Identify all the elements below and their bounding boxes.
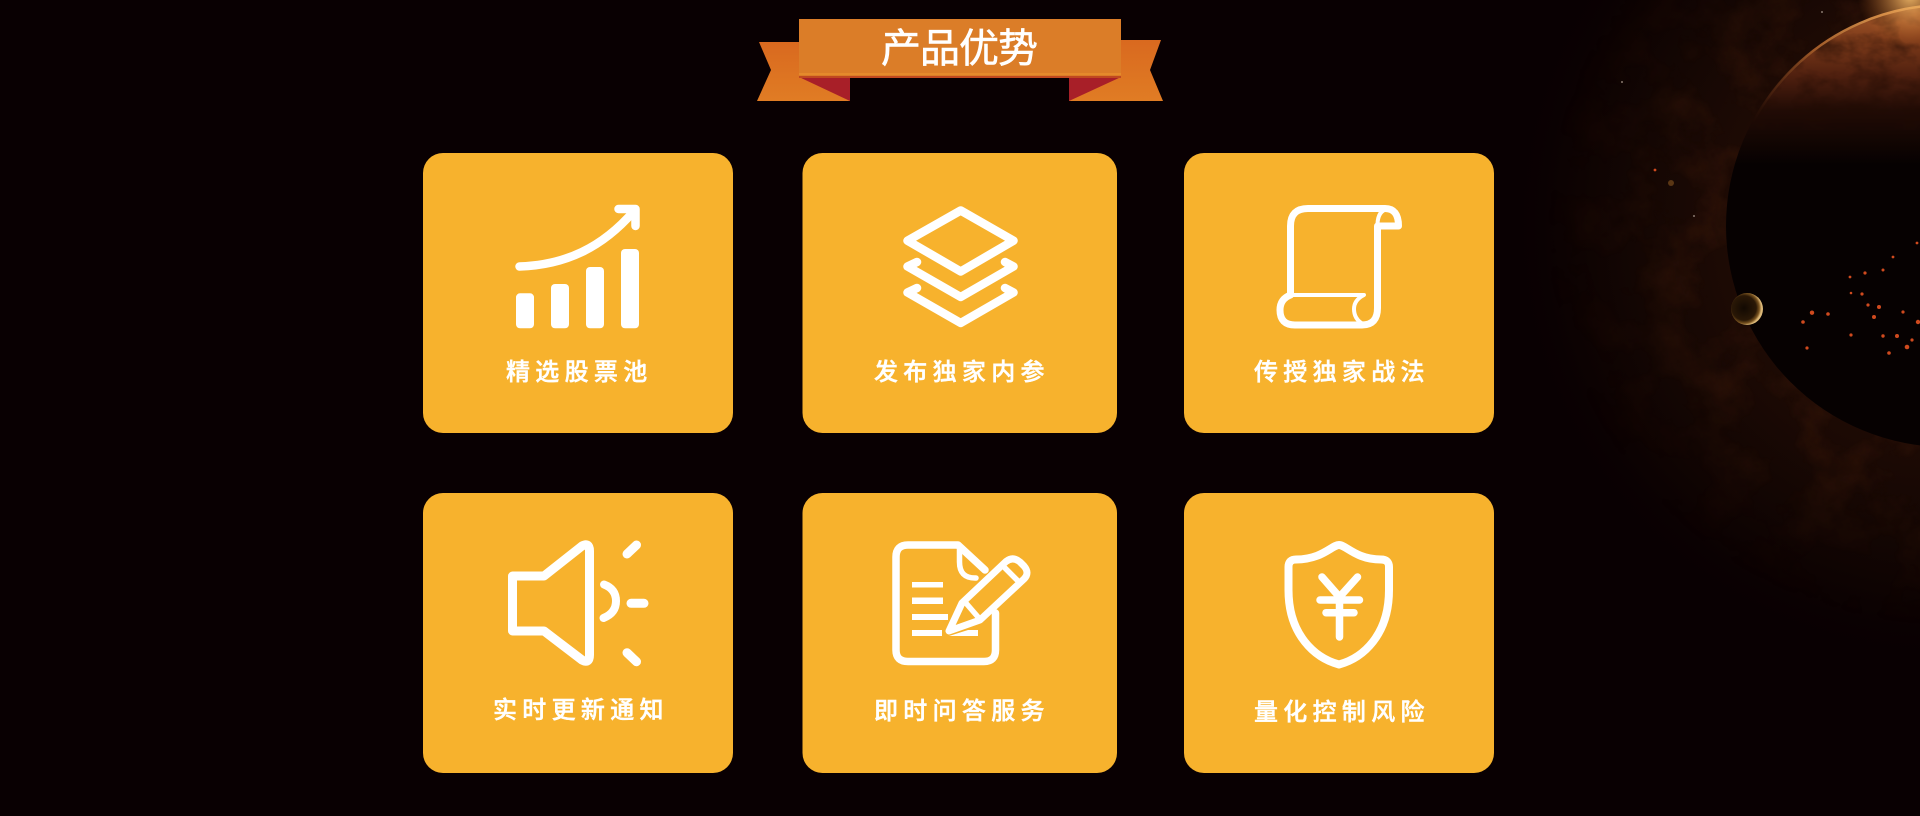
icon: speaker xyxy=(512,545,644,662)
icon: scroll xyxy=(1280,208,1398,325)
icon: layers xyxy=(908,210,1014,323)
title text: 产品优势 xyxy=(881,27,1037,71)
ribbon left fold xyxy=(799,77,850,101)
ribbon left tail xyxy=(757,42,850,101)
panel: 量化控制风险 xyxy=(1184,493,1494,773)
background: planet scene xyxy=(1579,0,1920,582)
ribbon band xyxy=(799,19,1121,77)
icon: rising bar chart xyxy=(516,209,639,328)
panel: 实时更新通知 xyxy=(423,493,733,773)
icon: shield with yen xyxy=(1288,545,1389,664)
ribbon right fold xyxy=(1069,77,1121,101)
label: 发布独家内参 xyxy=(874,359,1050,386)
panel: 即时问答服务 xyxy=(802,493,1117,773)
label: 传授独家战法 xyxy=(1254,359,1430,386)
title ribbon xyxy=(757,19,1163,101)
panel: 传授独家战法 xyxy=(1184,153,1494,433)
label: 量化控制风险 xyxy=(1254,699,1430,726)
label: 精选股票池 xyxy=(506,359,652,386)
infographic canvas xyxy=(423,0,1920,773)
label: 即时问答服务 xyxy=(874,698,1050,725)
label: 实时更新通知 xyxy=(493,697,669,724)
icon: document and pencil xyxy=(896,545,1027,662)
panel: 精选股票池 xyxy=(423,153,733,433)
ribbon right tail xyxy=(1069,40,1163,101)
panel: 发布独家内参 xyxy=(802,153,1117,433)
